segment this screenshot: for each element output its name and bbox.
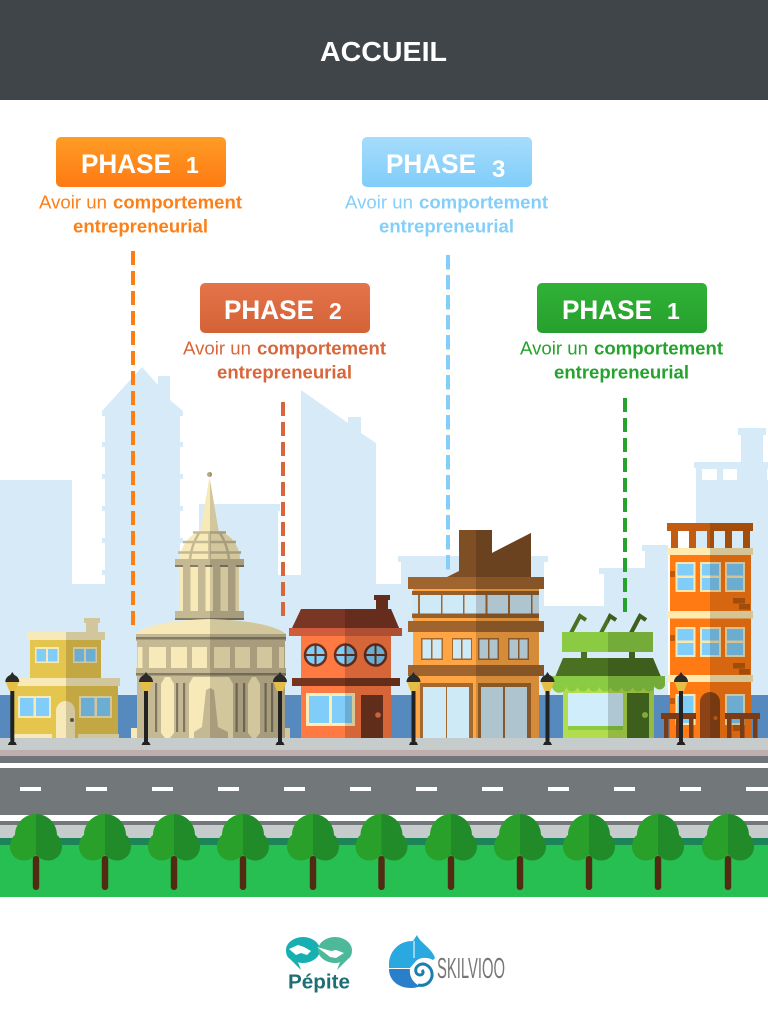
building: red house	[289, 595, 402, 738]
building: yellow house	[14, 618, 120, 738]
phase block: phase 3 blue	[345, 137, 548, 236]
phase block: phase 1 green: entrepreneurial	[554, 362, 689, 382]
phase block: phase 1 orange: 1	[186, 152, 199, 178]
dashed line: phase 2 coral	[281, 402, 285, 617]
building: brown tall house	[408, 530, 544, 738]
phase block: phase 1 orange	[39, 137, 242, 236]
icon: chameleon	[389, 935, 435, 988]
building: green shop	[552, 616, 665, 738]
title: ACCUEIL	[320, 36, 447, 67]
grass strip	[0, 838, 768, 897]
logo: Pépite: Pépite	[288, 970, 350, 994]
phase block: phase 3 blue: comportement	[419, 192, 548, 212]
skyline background	[0, 367, 768, 696]
street lamps	[5, 672, 688, 745]
phase block: phase 3 blue: entrepreneurial	[379, 216, 514, 236]
water band	[0, 695, 768, 739]
phase block: phase 3 blue: PHASE	[386, 149, 476, 179]
logo: Skilvioo: SKILVIOO	[437, 953, 505, 985]
icon: speech bubbles with hands	[286, 937, 352, 970]
phase block: phase 2 coral: Avoir un	[183, 338, 251, 358]
dashed line: phase 3 blue	[446, 255, 450, 570]
phase block: phase 1 green: 1	[667, 298, 680, 324]
dashed line: phase 1 orange	[131, 251, 135, 625]
benches	[661, 713, 760, 738]
lane markings	[20, 787, 768, 791]
phase block: phase 1 green: PHASE	[562, 295, 652, 325]
phase block: phase 1 orange: PHASE	[81, 149, 171, 179]
logo: Pépite	[286, 937, 352, 994]
phase block: phase 1 green: comportement	[594, 338, 723, 358]
phase block: phase 1 orange: entrepreneurial	[73, 216, 208, 236]
building: domed hall	[131, 472, 290, 738]
phase block: phase 3 blue: 3	[492, 156, 505, 183]
phase block: phase 2 coral	[183, 283, 386, 382]
phase block: phase 2 coral: comportement	[257, 338, 386, 358]
phase block: phase 1 green	[520, 283, 723, 382]
logo: Skilvioo	[389, 935, 505, 988]
building: orange tower	[661, 523, 760, 738]
row of trees	[10, 814, 754, 890]
dashed line: phase 1 green	[623, 398, 627, 612]
phase block: phase 2 coral: 2	[329, 298, 342, 324]
road and sidewalk	[0, 738, 768, 838]
phase block: phase 1 orange: Avoir un	[39, 192, 107, 212]
header bar	[0, 0, 768, 100]
phase block: phase 3 blue: Avoir un	[345, 192, 413, 212]
phase block: phase 1 green: Avoir un	[520, 338, 588, 358]
phase block: phase 1 orange: comportement	[113, 192, 242, 212]
phase block: phase 2 coral: entrepreneurial	[217, 362, 352, 382]
phase block: phase 2 coral: PHASE	[224, 295, 314, 325]
